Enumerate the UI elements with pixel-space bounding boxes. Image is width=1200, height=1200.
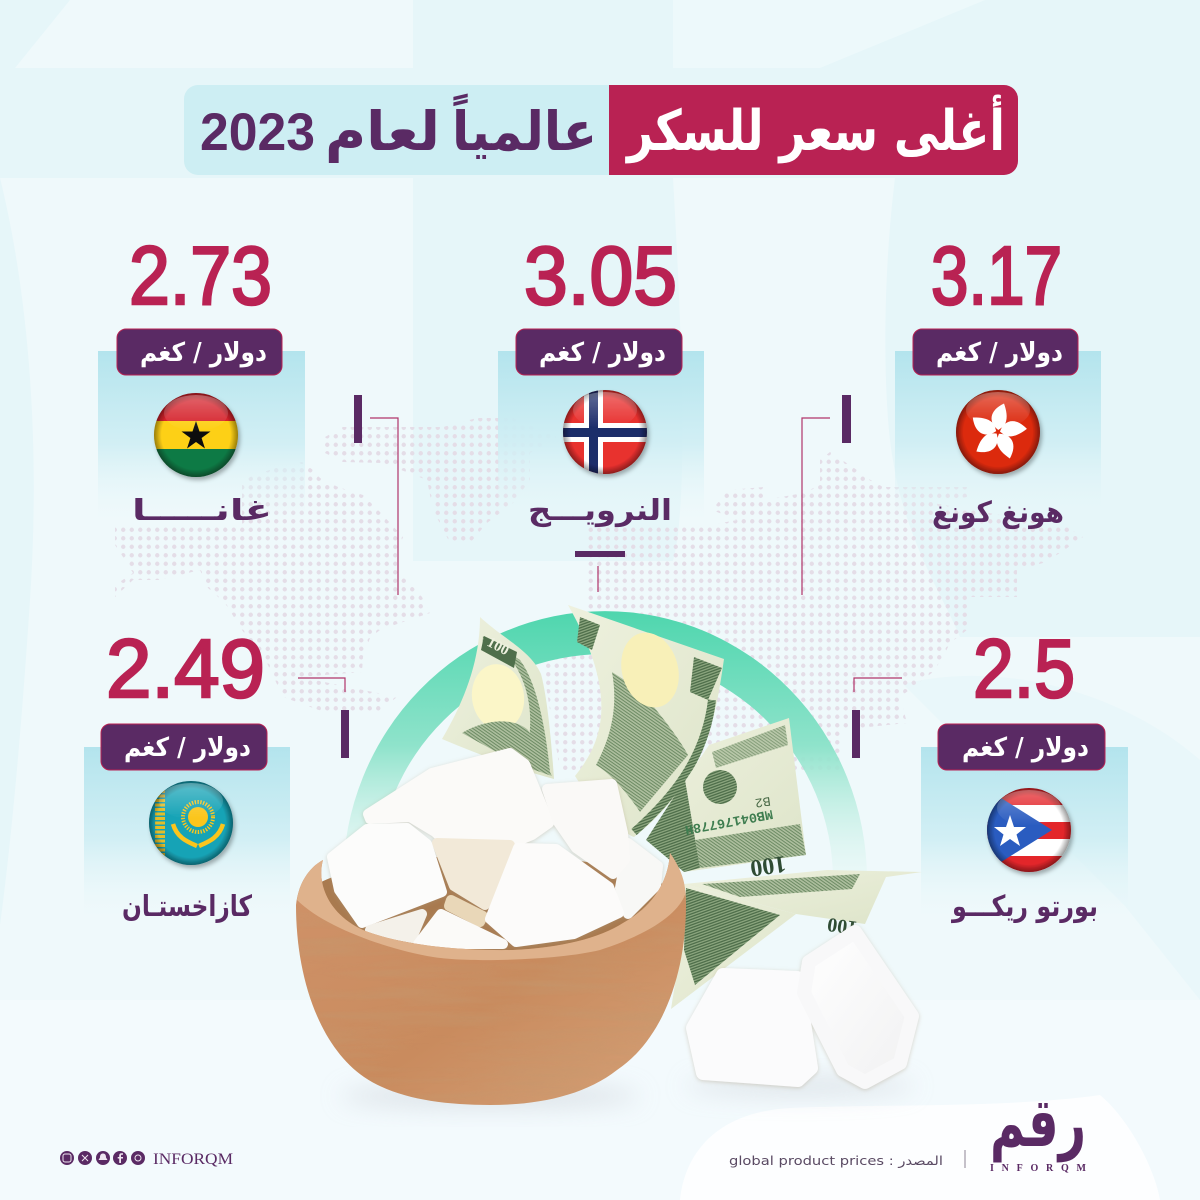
title year: 2023 — [200, 103, 315, 162]
panel gradient — [98, 351, 305, 521]
price: 2.49 — [106, 622, 265, 715]
bill 2 — [568, 605, 724, 837]
bowl with sugar — [290, 753, 690, 1110]
bill 3: 100 — [749, 850, 788, 881]
bill 3: B2 — [754, 793, 772, 810]
bowl rim highlight — [297, 853, 685, 960]
world dot map — [100, 410, 1100, 780]
cube A — [693, 975, 811, 1080]
panel: Norway — [498, 229, 704, 527]
icon: Ghana flag — [150, 390, 242, 480]
wood grain — [299, 880, 666, 1064]
panel: Kazakhstan — [84, 622, 290, 923]
panel: Hong Kong — [895, 229, 1101, 529]
bowl front — [296, 853, 686, 1105]
unit pill: دولار / كغم — [962, 733, 1089, 763]
panel: Ghana — [98, 229, 305, 527]
logo — [990, 1084, 1087, 1174]
unit pill: دولار / كغم — [936, 338, 1063, 368]
panel gradient — [921, 747, 1128, 917]
icon: Kazakhstan flag — [145, 778, 237, 870]
bill 1: 100 — [484, 634, 511, 659]
title banner — [184, 85, 1018, 175]
title white text: أغلى سعر للسكر — [625, 94, 1005, 164]
panel: Puerto Rico — [921, 622, 1128, 923]
country name: النرويـــج — [528, 493, 672, 527]
social icons — [60, 1151, 145, 1165]
bill 3: MB04176778H — [683, 805, 774, 836]
panel gradient — [498, 351, 704, 521]
price: 2.5 — [973, 622, 1075, 715]
cube B — [804, 932, 912, 1082]
title background — [184, 85, 1018, 175]
bill 4 — [671, 870, 922, 1009]
icon: Puerto Rico flag — [982, 786, 1075, 876]
dollar bills — [442, 605, 922, 1009]
panel gradient — [84, 747, 290, 917]
footer: social handle — [60, 1151, 233, 1168]
panel gradient — [895, 351, 1101, 521]
unit pill: دولار / كغم — [140, 338, 267, 368]
logo wordmark: INFORQM — [990, 1163, 1087, 1174]
logo mark: رقم — [990, 1084, 1086, 1163]
title purple word 1: عالمياً — [452, 93, 597, 163]
loose sugar cubes — [693, 932, 912, 1082]
bowl inner wall — [300, 855, 680, 955]
country name: كازاخستـان — [122, 889, 252, 923]
title crimson part — [609, 85, 1018, 175]
country name: غانـــــا — [132, 493, 272, 527]
country name: بورتو ريكـــو — [950, 889, 1098, 923]
unit pill: دولار / كغم — [124, 733, 251, 763]
unit pill — [101, 724, 267, 770]
price: 3.17 — [931, 229, 1062, 322]
source line: global product prices : المصدر — [729, 1153, 943, 1169]
country name: هونغ كونغ — [932, 495, 1064, 529]
unit pill — [938, 724, 1105, 770]
bill 4: 100 — [826, 913, 859, 939]
unit pill: دولار / كغم — [539, 338, 666, 368]
sugar cubes in bowl — [332, 753, 658, 944]
connector markers — [298, 395, 902, 758]
price: 2.73 — [129, 229, 272, 322]
green arc behind bowl — [343, 611, 867, 880]
unit pill — [117, 329, 282, 375]
title purple word 2: لعام — [325, 100, 440, 163]
icon: Norway flag — [560, 388, 650, 478]
icon: Hong Kong flag — [956, 390, 1040, 474]
handle: INFORQM — [153, 1151, 233, 1168]
price: 3.05 — [524, 229, 677, 322]
bill 3 — [646, 718, 806, 881]
bill 1 — [442, 617, 554, 779]
unit pill — [516, 329, 682, 375]
divider — [964, 1150, 966, 1168]
ground shadows — [340, 1077, 915, 1108]
unit pill — [913, 329, 1078, 375]
